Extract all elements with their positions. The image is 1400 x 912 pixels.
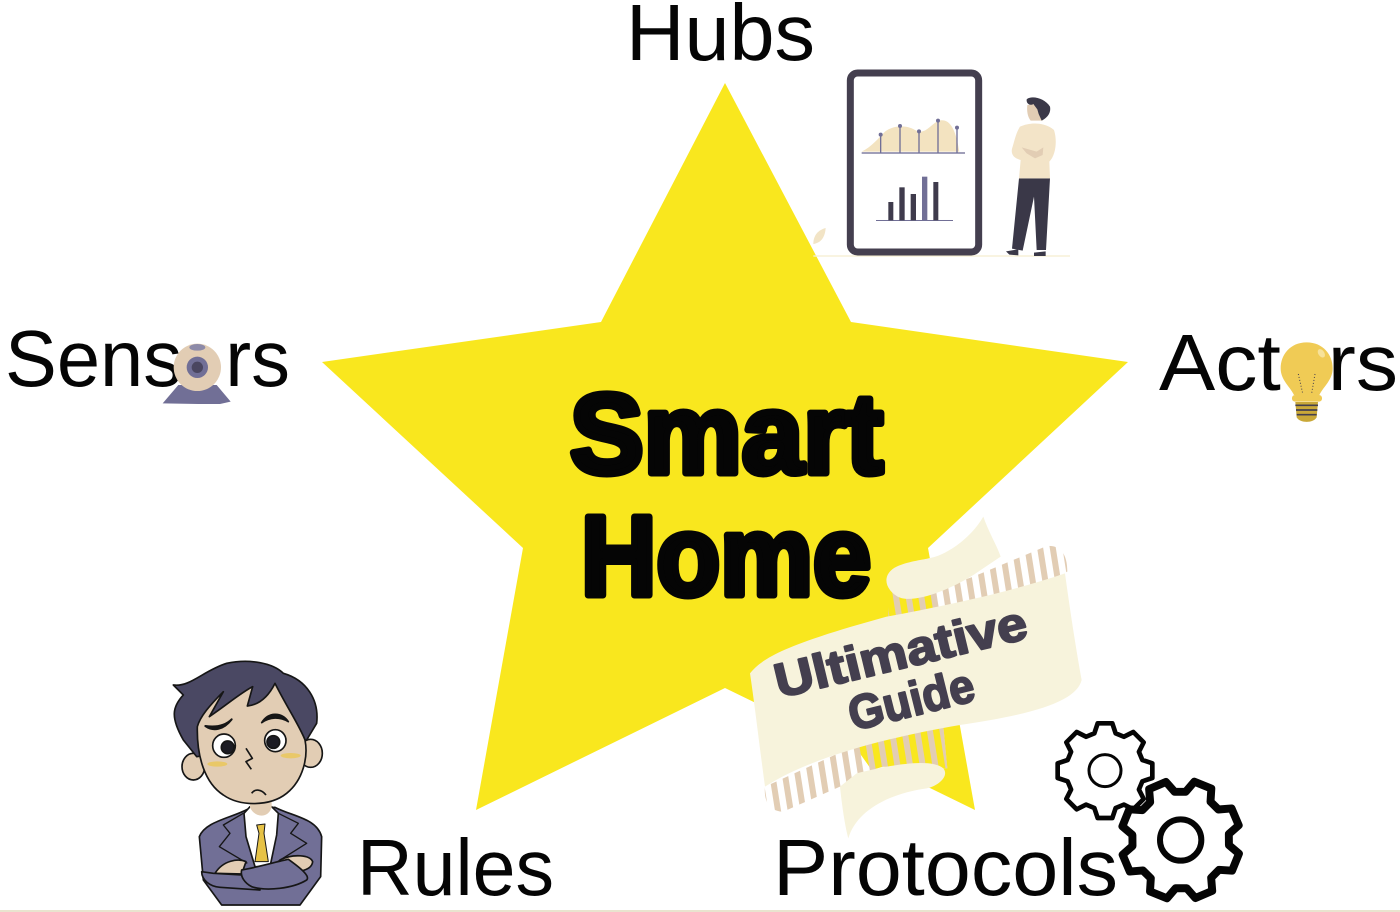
bottom star remainder [855, 727, 947, 770]
crossed arms [202, 856, 313, 890]
top stripes backing [933, 546, 1067, 613]
bottom edge line [0, 910, 1400, 912]
area chart [862, 119, 965, 154]
illustration: confused man in suit [173, 661, 322, 905]
center title: Smart Home [570, 371, 883, 619]
label: Actors: Actors [1159, 318, 1398, 407]
label: Rules: Rules [357, 823, 554, 912]
main band [750, 573, 1082, 787]
ribbon text: Ultimative [769, 597, 1032, 709]
icon: webcam [163, 344, 231, 404]
face [197, 683, 306, 804]
top curl [886, 517, 1001, 599]
bottom curl [840, 763, 945, 838]
ribbon text: Guide [843, 659, 980, 742]
center title: Smart Home: Home [581, 493, 871, 619]
person [1006, 97, 1056, 256]
ribbon: Ultimative Guide [750, 517, 1082, 838]
ribbon text [769, 597, 1032, 742]
icon: gears [1058, 723, 1258, 912]
neck [250, 800, 272, 816]
shirt [244, 807, 278, 867]
bar chart [876, 177, 953, 221]
top stripes pattern [888, 546, 1067, 618]
ground line [813, 255, 1070, 257]
large gear [1104, 763, 1258, 912]
bottom stripes pattern [765, 727, 947, 812]
icon: light bulb [1281, 342, 1333, 422]
hair [173, 661, 317, 757]
star [322, 83, 1128, 810]
label: Sensors: Sensors [5, 314, 290, 403]
icon: tablet with charts and person [813, 73, 1070, 257]
leaf [813, 228, 826, 244]
center title: Smart Home: Smart [570, 371, 883, 497]
label: Protocols: Protocols [773, 823, 1118, 912]
bottom stripes backing [765, 727, 947, 812]
ears [182, 739, 322, 780]
face features [205, 714, 301, 795]
tie [255, 824, 268, 862]
tablet frame [850, 73, 979, 252]
suit [199, 807, 322, 905]
jacket lapels [219, 813, 307, 863]
small gear [1058, 723, 1152, 818]
